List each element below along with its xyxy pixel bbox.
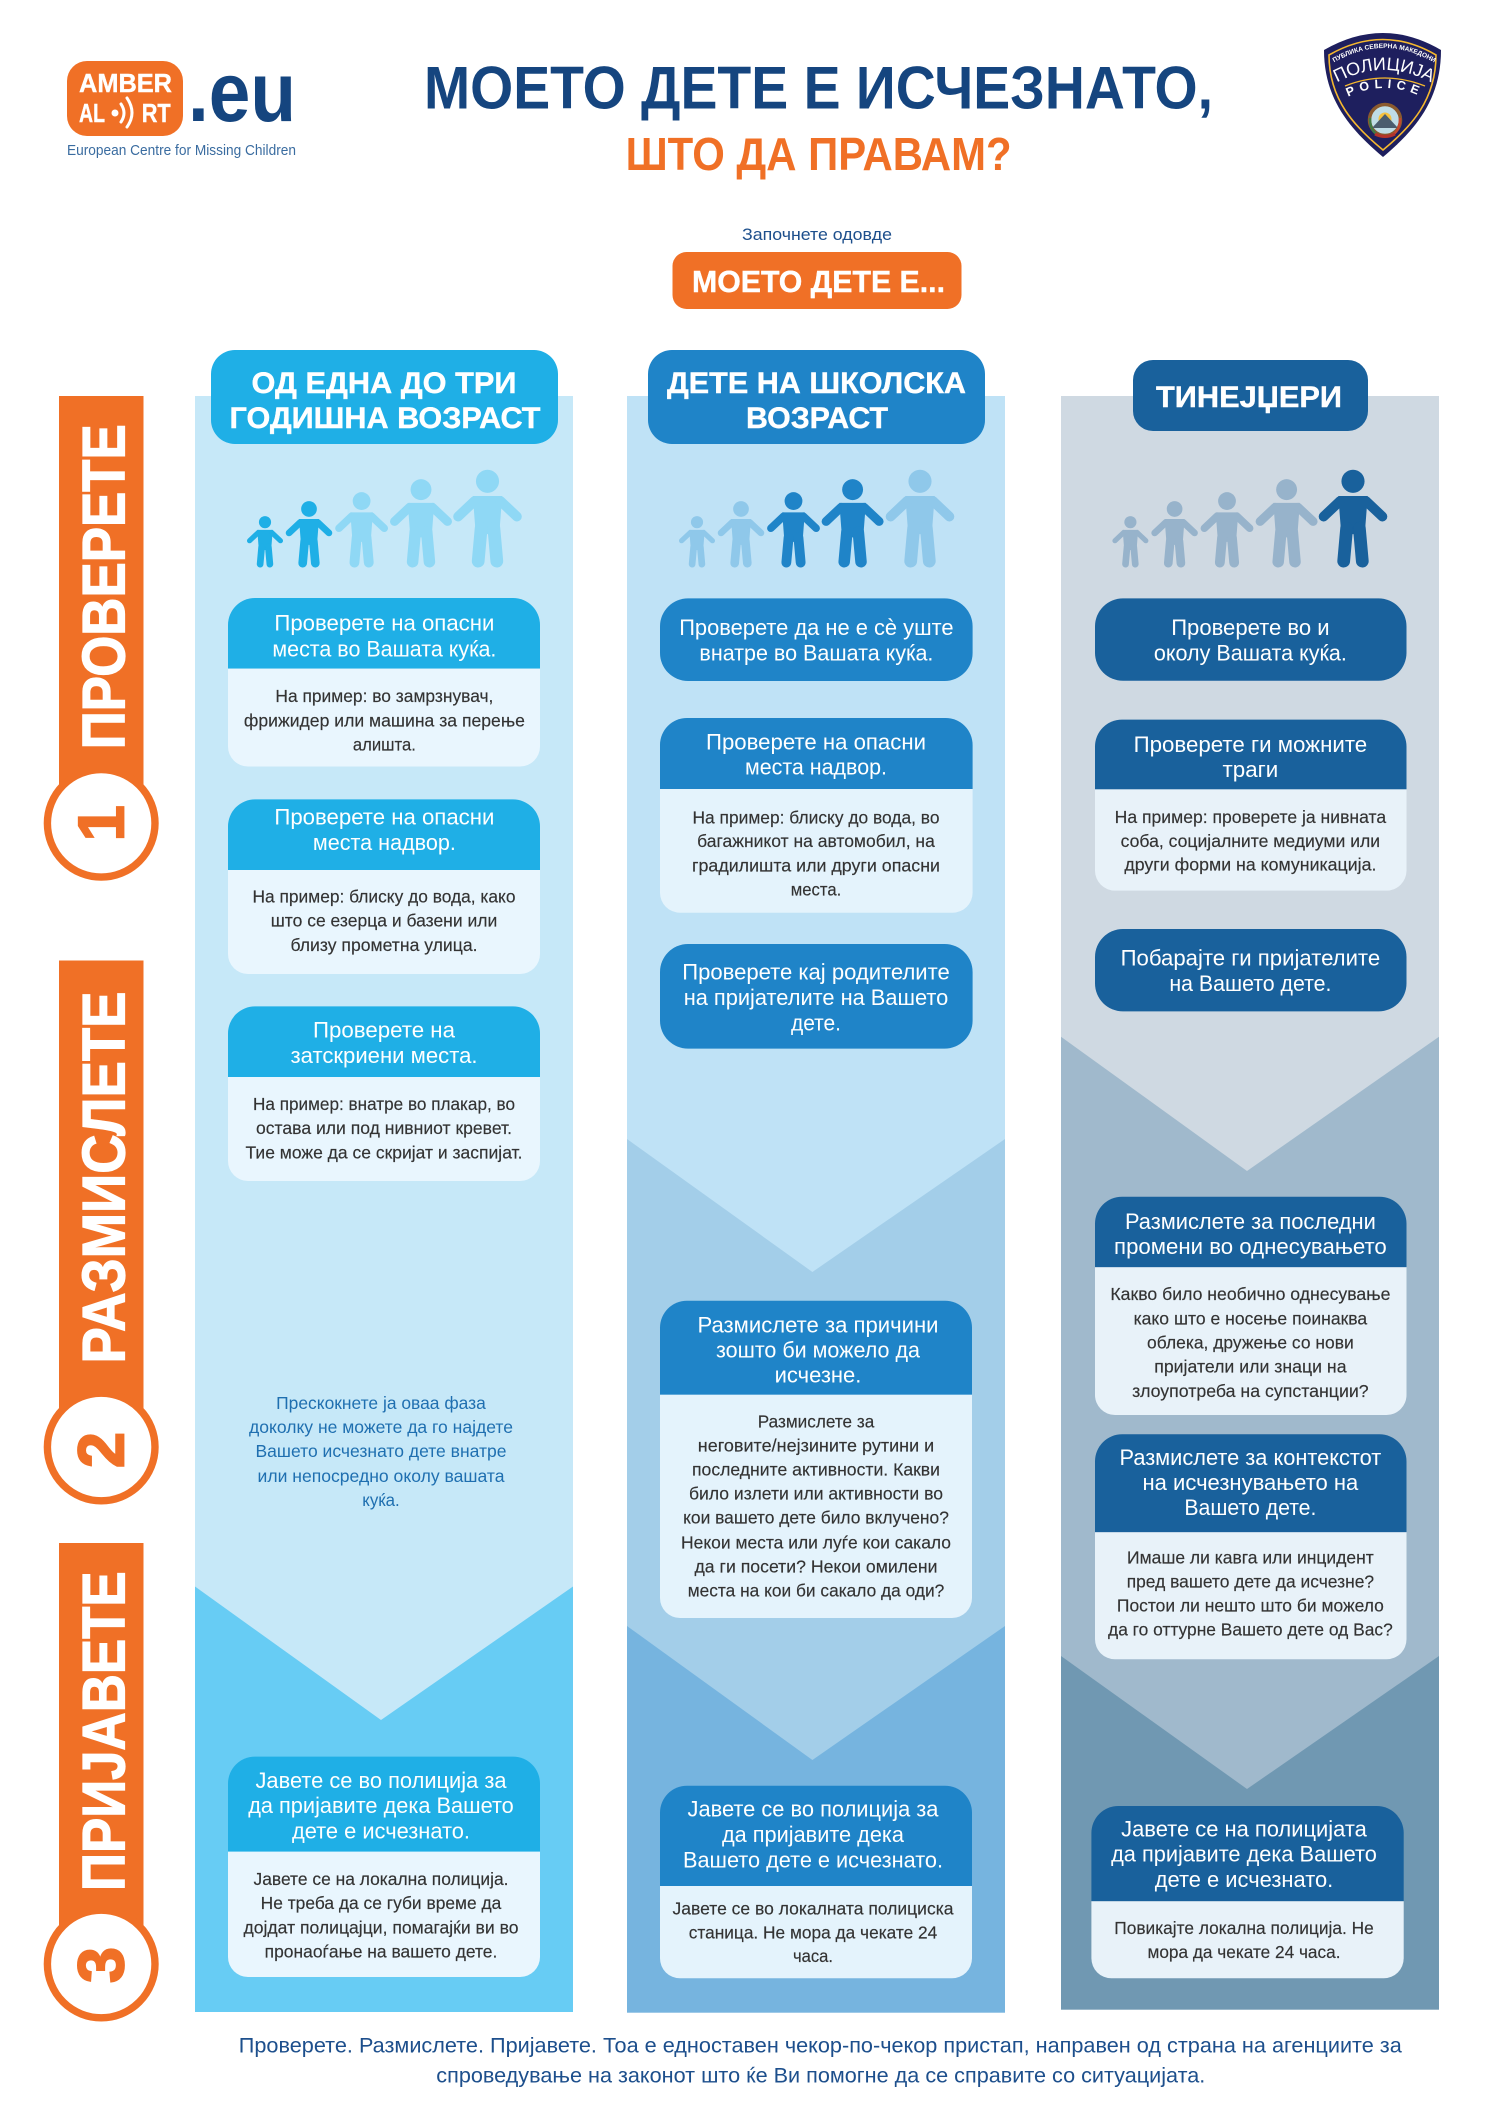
- column heading: [211, 350, 558, 444]
- card: dangerous places outside: што се езерца и базени или: [271, 910, 497, 930]
- card: recent behaviour changes: Размислете за последни: [1125, 1209, 1376, 1234]
- pill: check with friends' parents: на пријателите на Вашето: [684, 985, 948, 1010]
- card: call the police: [1091, 1806, 1404, 1978]
- pill: check with friends' parents: дете.: [791, 1011, 841, 1036]
- card: think about reasons: места на кои би сакало да оди?: [688, 1580, 945, 1600]
- card: recent behaviour changes: пријатели или знаци на: [1154, 1357, 1347, 1377]
- card: dangerous places outside: На пример: блиску до вода, во: [692, 808, 940, 828]
- card: call the police: дете е исчезнато.: [1155, 1867, 1333, 1892]
- card: think about reasons: неговите/нејзините рутини и: [698, 1436, 934, 1456]
- card: call the police: Повикајте локална полиција. Не: [1114, 1918, 1374, 1938]
- card: possible traces: други форми на комуникација.: [1124, 855, 1376, 875]
- card: dangerous places at home: На пример: во замрзнувач,: [275, 686, 493, 706]
- card: call the police: дојдат полицајци, помагајќи ви во: [244, 1917, 518, 1937]
- card: possible traces: Проверете ги можните: [1134, 732, 1367, 757]
- card: context of disappearance: Постои ли нешто што би можело: [1117, 1595, 1384, 1615]
- card: call the police: мора да чекате 24 часа.: [1148, 1942, 1340, 1962]
- card: call the police: Јавете се во полиција за: [256, 1768, 507, 1793]
- card: think about reasons: последните активности. Какви: [692, 1460, 940, 1480]
- card: context of disappearance: [1095, 1434, 1406, 1659]
- pill: check with friends' parents: Проверете кај родителите: [682, 960, 950, 985]
- icon: police badge: [1324, 33, 1441, 157]
- column heading: ОД ЕДНА ДО ТРИ: [252, 367, 516, 400]
- card: dangerous places outside: Проверете на опасни: [706, 729, 926, 754]
- card: call the police: да пријавите дека Вашето: [1111, 1842, 1377, 1867]
- card: recent behaviour changes: промени во однесувањето: [1114, 1234, 1387, 1259]
- card: dangerous places at home: алишта.: [353, 734, 416, 754]
- footer text: Проверете. Размислете. Пријавете. Тоа е едноставен чекор-по-чекор пристап, направен од страна на агенциите за: [239, 2035, 1402, 2058]
- card: call the police: Јавете се на полицијата: [1121, 1817, 1368, 1842]
- title: МОЕТО ДЕТЕ Е ИСЧЕЗНАТО,: [424, 55, 1213, 122]
- card: hidden places: На пример: внатре во плакар, во: [253, 1094, 515, 1114]
- column heading: [648, 350, 985, 444]
- card: context of disappearance: Размислете за контекстот: [1120, 1445, 1381, 1470]
- card: recent behaviour changes: злоупотреба на супстанции?: [1132, 1381, 1369, 1401]
- logo: Amber Alert: AMBER: [79, 68, 172, 98]
- icon: police badge: ПОЛИЦИЈА: [1332, 58, 1432, 82]
- panel: school-age column: [627, 350, 1005, 2013]
- card: call the police: дете е исчезнато.: [292, 1818, 470, 1843]
- card: call the police: [660, 1786, 972, 1978]
- card: dangerous places outside: багажникот на автомобил, на: [697, 831, 935, 851]
- step 2 banner: РАЗМИСЛЕТЕ: [70, 992, 137, 1364]
- card: context of disappearance: Имаше ли кавга или инцидент: [1127, 1547, 1374, 1567]
- card: think about reasons: Размислете за причини: [698, 1313, 938, 1338]
- card: think about reasons: било излети или активности во: [689, 1484, 943, 1504]
- pill: check with friends' parents: [660, 944, 973, 1049]
- title: ШТО ДА ПРАВАМ?: [626, 128, 1012, 180]
- card: possible traces: [1095, 720, 1406, 891]
- note: skip this phase: [249, 1393, 513, 1510]
- note: skip this phase: куќа.: [362, 1490, 400, 1510]
- card: dangerous places at home: Проверете на опасни: [274, 611, 494, 636]
- step 1 banner: 1: [65, 805, 138, 841]
- card: dangerous places outside: Проверете на опасни: [274, 805, 494, 830]
- card: hidden places: Проверете на: [313, 1018, 456, 1042]
- pill: check in and around home: [1095, 598, 1406, 681]
- start button: [672, 252, 962, 309]
- card: call the police: пронаоѓање на вашето дете.: [265, 1942, 497, 1962]
- icon: people, oldest highlighted: [1115, 470, 1382, 564]
- card: hidden places: затскриени места.: [290, 1043, 478, 1068]
- card: call the police: станица. Не мора да чекате 24: [689, 1922, 938, 1942]
- card: think about reasons: кои вашето дете било вклучено?: [683, 1508, 949, 1528]
- card: call the police: Јавете се во локалната полициска: [672, 1898, 954, 1918]
- card: dangerous places outside: [660, 718, 973, 913]
- card: dangerous places outside: места надвор.: [745, 755, 887, 780]
- pill: check inside home: внатре во Вашата куќа.: [699, 640, 933, 665]
- card: call the police: [228, 1757, 540, 1977]
- card: context of disappearance: Вашето дете.: [1184, 1495, 1316, 1520]
- start button: МОЕТО ДЕТЕ Е...: [692, 264, 945, 299]
- column heading: ДЕТЕ НА ШКОЛСКА: [667, 367, 966, 400]
- column heading: [1133, 360, 1368, 431]
- card: dangerous places outside: места надвор.: [313, 830, 456, 855]
- card: dangerous places at home: места во Вашата куќа.: [272, 636, 496, 661]
- card: hidden places: Тие може да се скријат и заспијат.: [246, 1143, 522, 1163]
- card: think about reasons: Размислете за: [758, 1411, 875, 1431]
- logo: Amber Alert: [67, 45, 296, 159]
- pill: ask friends: на Вашето дете.: [1169, 971, 1331, 996]
- step 3 banner: [47, 1543, 155, 2018]
- title: [424, 55, 1213, 180]
- step 1 banner: [47, 396, 155, 877]
- card: recent behaviour changes: облека, дружење со нови: [1147, 1332, 1354, 1352]
- panel: teenagers column: [1061, 360, 1439, 2010]
- card: possible traces: На пример: проверете ја нивната: [1115, 807, 1386, 827]
- card: think about reasons: да ги посети? Некои омилени: [694, 1556, 938, 1576]
- card: hidden places: остава или под нивниот кревет.: [256, 1118, 512, 1138]
- panel: toddlers column: [195, 350, 573, 2012]
- card: context of disappearance: да го оттурне Вашето дете од Вас?: [1108, 1619, 1393, 1639]
- note: skip this phase: доколку не можете да го најдете: [249, 1417, 513, 1437]
- card: call the police: Јавете се на локална полиција.: [254, 1869, 508, 1889]
- pill: check inside home: Проверете да не е сè уште: [679, 615, 954, 640]
- card: dangerous places outside: [228, 799, 540, 974]
- card: recent behaviour changes: [1095, 1197, 1406, 1415]
- note: skip this phase: Прескокнете ја оваа фаза: [276, 1393, 486, 1413]
- card: call the police: Вашето дете е исчезнато.: [683, 1847, 943, 1872]
- card: context of disappearance: на исчезнувањето на: [1142, 1470, 1359, 1495]
- note: skip this phase: или непосредно околу вашата: [258, 1466, 505, 1486]
- card: think about reasons: Некои места или луѓе кои сакало: [681, 1532, 951, 1552]
- step 2 banner: 2: [65, 1432, 138, 1468]
- note: skip this phase: Вашето исчезнато дете внатре: [256, 1441, 506, 1461]
- card: call the police: да пријавите дека: [722, 1822, 905, 1847]
- card: call the police: Јавете се во полиција за: [688, 1797, 939, 1822]
- card: call the police: Не треба да се губи време да: [261, 1893, 502, 1913]
- card: think about reasons: [660, 1301, 972, 1618]
- logo: Amber Alert: RT: [142, 98, 171, 128]
- footer text: спроведување на законот што ќе Ви помогне да се справите со ситуацијата.: [436, 2065, 1205, 2088]
- start label: Започнете одовде: [742, 225, 892, 244]
- card: dangerous places outside: близу прометна улица.: [290, 935, 478, 955]
- step 3 banner: 3: [65, 1947, 138, 1983]
- pill: check in and around home: околу Вашата куќа.: [1154, 640, 1347, 665]
- logo: Amber Alert: .eu: [188, 45, 296, 139]
- icon: people, middle two highlighted: [682, 470, 949, 564]
- card: recent behaviour changes: како што е носење поинаква: [1134, 1308, 1367, 1328]
- card: recent behaviour changes: Какво било необично однесување: [1110, 1284, 1390, 1304]
- footer text: [239, 2035, 1402, 2088]
- step 2 banner: [47, 960, 155, 1501]
- icon: people, youngest two highlighted: [250, 470, 517, 564]
- card: dangerous places at home: фрижидер или машина за перење: [244, 710, 525, 730]
- logo: Amber Alert: AL: [79, 98, 105, 128]
- icon: police badge: POLICE: [1346, 79, 1420, 96]
- column heading: ТИНЕЈЏЕРИ: [1156, 381, 1342, 414]
- card: hidden places: [228, 1006, 540, 1181]
- card: think about reasons: зошто би можело да: [716, 1338, 921, 1363]
- pill: check inside home: [660, 598, 973, 681]
- card: context of disappearance: пред вашето дете да исчезне?: [1127, 1571, 1374, 1591]
- pill: check in and around home: Проверете во и: [1171, 615, 1330, 640]
- step 1 banner: ПРОВЕРЕТЕ: [70, 424, 137, 749]
- card: dangerous places outside: места.: [791, 880, 841, 900]
- card: dangerous places at home: [228, 598, 540, 766]
- card: dangerous places outside: градилишта или други опасни: [692, 855, 940, 875]
- column heading: ГОДИШНА ВОЗРАСТ: [230, 402, 540, 435]
- pill: ask friends: Побарајте ги пријателите: [1121, 946, 1380, 971]
- card: dangerous places outside: На пример: блиску до вода, како: [252, 886, 516, 906]
- card: call the police: да пријавите дека Вашето: [248, 1793, 514, 1818]
- card: possible traces: соба, социјалните медиуми или: [1121, 831, 1380, 851]
- card: possible traces: траги: [1223, 757, 1278, 782]
- step 3 banner: ПРИЈАВЕТЕ: [70, 1571, 137, 1891]
- card: call the police: часа.: [793, 1946, 833, 1966]
- column heading: ВОЗРАСТ: [746, 402, 888, 435]
- logo: Amber Alert: European Centre for Missing Children: [67, 142, 296, 159]
- pill: ask friends: [1095, 929, 1406, 1011]
- card: think about reasons: исчезне.: [775, 1363, 861, 1388]
